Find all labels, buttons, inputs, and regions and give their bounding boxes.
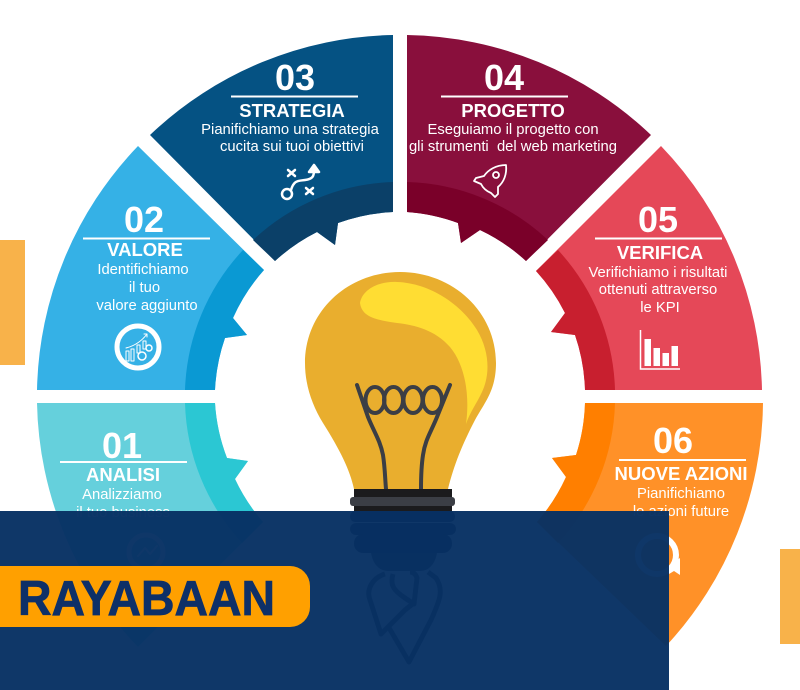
left side accent bar (0, 240, 25, 365)
panel: 06 nuove azioni: 06 (653, 420, 693, 461)
panel: 05 verifica: 05 (638, 199, 678, 240)
panel: 02 valore: VALORE (107, 239, 183, 260)
panel: 02 valore: il tuo (129, 280, 160, 296)
panel: 03 strategia: 03 (275, 57, 315, 98)
panel: 04 progetto (407, 35, 651, 261)
icon: target analysis (129, 535, 163, 569)
panel: 05 verifica: VERIFICA (617, 242, 703, 263)
panel: 06 nuove azioni (537, 403, 763, 646)
panel: 05 verifica: Verifichiamo i risultati (589, 265, 727, 281)
panel: 02 valore (37, 146, 264, 390)
bulb glass (305, 272, 496, 489)
panel: 06 nuove azioni: Pianifichiamo (637, 486, 725, 502)
panel: 01 analisi (37, 403, 263, 647)
logo badge (0, 566, 310, 627)
icon: rocket (474, 165, 506, 197)
icon: rosette (638, 536, 680, 575)
panel: 05 verifica: le KPI (640, 300, 680, 316)
panel: 04 progetto: gli strumenti del web marketing (409, 139, 617, 155)
panel: 04 progetto: 04 (484, 57, 524, 98)
panel: 04 progetto: PROGETTO (461, 100, 565, 121)
panel: 05 verifica: ottenuti attraverso (599, 282, 717, 298)
bulb highlight (360, 282, 487, 424)
filament (357, 385, 450, 489)
dark overlay banner (0, 511, 669, 690)
panel: 06 nuove azioni: NUOVE AZIONI (615, 463, 747, 484)
panel: 01 analisi: il tuo business (76, 505, 170, 521)
panel: 03 strategia (150, 35, 393, 261)
icon: value growth (117, 326, 159, 368)
bulb flame tip (369, 572, 440, 662)
panel: 03 strategia: Pianifichiamo una strategia (201, 122, 380, 138)
panel: 01 analisi: 01 (102, 425, 142, 466)
panel: 02 valore: Identifichiamo (97, 262, 189, 278)
panel: 01 analisi: ANALISI (86, 464, 160, 485)
right side accent bar (780, 549, 800, 644)
panel: 02 valore: 02 (124, 199, 164, 240)
panel: 03 strategia: STRATEGIA (239, 100, 345, 121)
panel: 01 analisi: Analizziamo (82, 487, 162, 503)
panel: 05 verifica (536, 146, 762, 390)
icon: strategy path (282, 165, 319, 199)
panel: 06 nuove azioni: le azioni future (633, 504, 729, 520)
icon: bar chart (640, 330, 680, 369)
logo wordmark: RAYABAAN (18, 572, 275, 626)
panel: 04 progetto: Eseguiamo il progetto con (427, 122, 599, 138)
panel: 03 strategia: cucita sui tuoi obiettivi (220, 139, 364, 155)
panel: 02 valore: valore aggiunto (96, 298, 198, 314)
icon: light bulb (305, 272, 496, 662)
bulb base (354, 489, 452, 513)
